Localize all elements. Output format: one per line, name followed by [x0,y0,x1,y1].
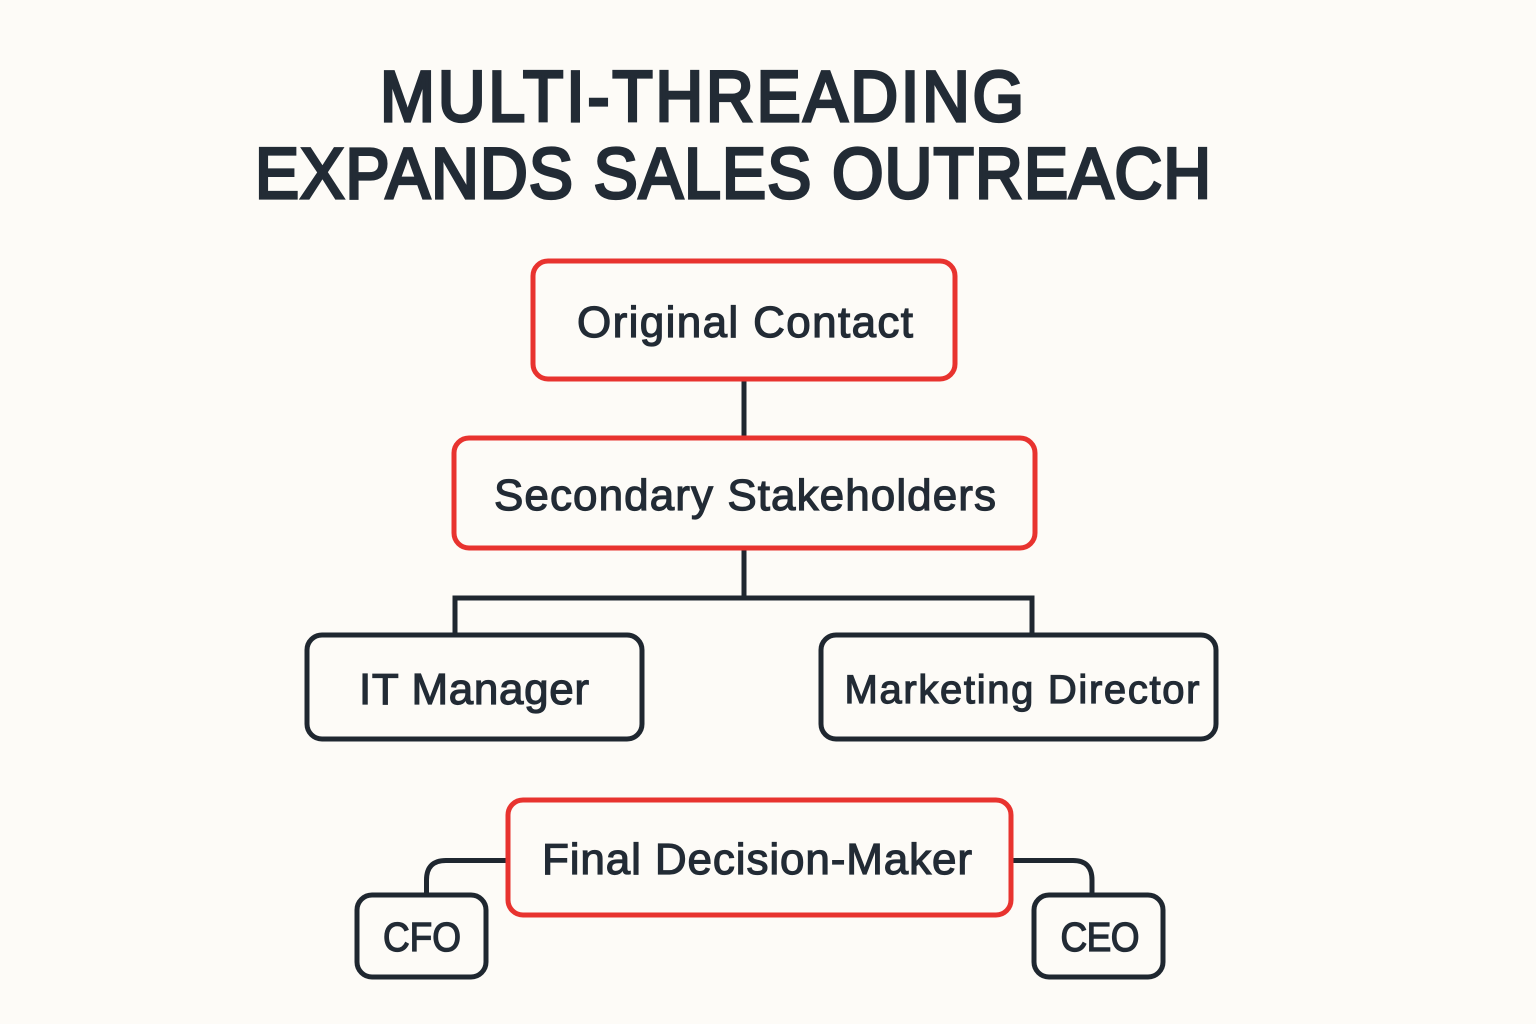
box: original contact [533,261,955,379]
box: marketing director: Marketing Director [844,668,1200,712]
box: CEO [1034,895,1163,977]
connector: final decision-maker to CEO [1012,860,1092,895]
box: secondary stakeholders [454,438,1035,548]
connector: original contact to secondary stakeholders [742,379,746,438]
box: original contact: Original Contact [577,298,913,347]
title: EXPANDS SALES OUTREACH [255,134,1211,214]
box: IT manager [307,635,642,739]
box: CEO: CEO [1060,915,1140,960]
box: secondary stakeholders: Secondary Stakeholders [494,471,996,520]
box: final decision-maker: Final Decision-Maker [542,835,972,884]
box: IT manager: IT Manager [359,665,589,714]
title: MULTI-THREADING [380,57,1024,137]
box: marketing director [821,635,1216,739]
box: CFO: CFO [383,915,461,960]
connector: final decision-maker to CFO [426,860,508,895]
title [255,57,1211,214]
connector: secondary stakeholders to IT manager and marketing director [455,548,1032,635]
box: CFO [357,895,486,977]
box: final decision-maker [508,800,1011,915]
